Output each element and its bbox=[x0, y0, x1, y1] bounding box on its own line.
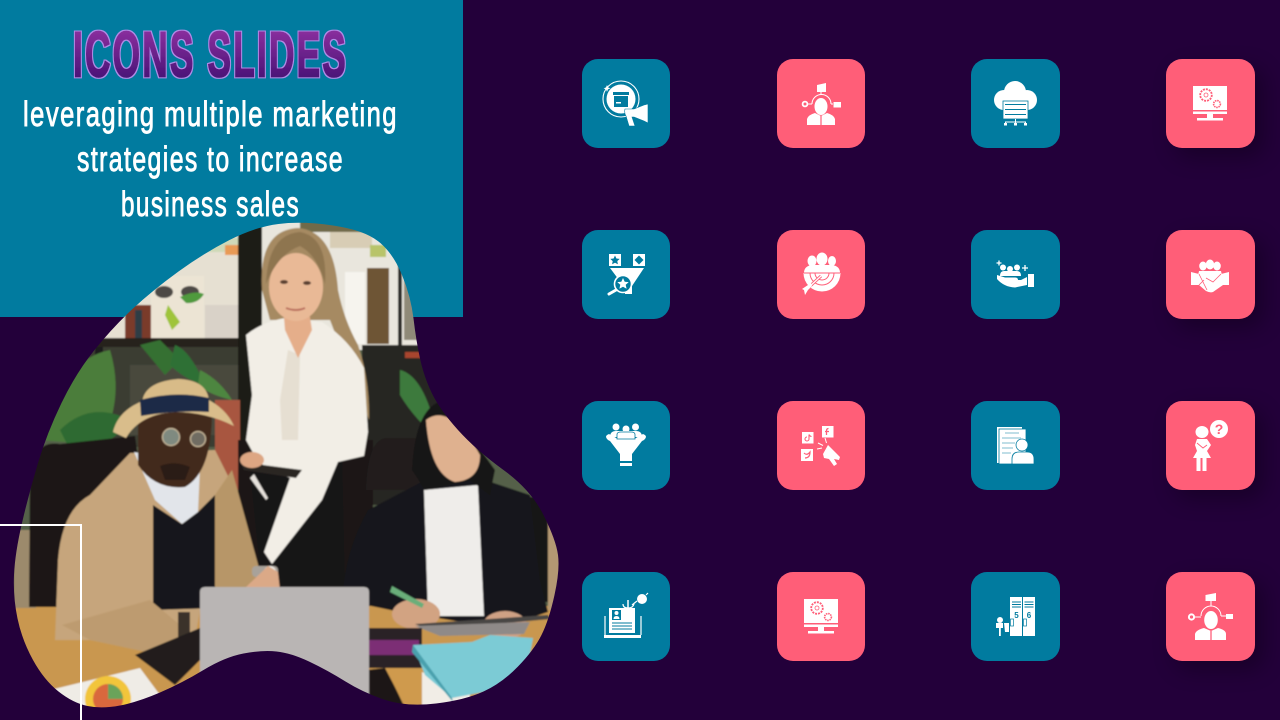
desk items left bbox=[135, 628, 200, 685]
subtitle: business sales bbox=[121, 185, 300, 224]
tile: confused customer bbox=[1166, 401, 1255, 490]
icon: computer settings bbox=[1193, 86, 1227, 120]
icon: numbered lockers and person bbox=[996, 597, 1035, 636]
right woman: t-shirt bbox=[424, 485, 484, 616]
tile: lockers bbox=[971, 572, 1060, 661]
icon: documents and person bbox=[997, 427, 1034, 464]
icon: group with target and arrow bbox=[802, 252, 840, 295]
tile: target audience bbox=[777, 230, 865, 319]
tile: business partnership bbox=[1166, 230, 1255, 319]
man: hat bbox=[113, 398, 234, 438]
woman standing: trousers bbox=[257, 462, 342, 532]
right chair bbox=[374, 438, 419, 490]
clipboard bbox=[415, 614, 549, 627]
tile: monitor with gears bbox=[1166, 59, 1255, 148]
right shelving bbox=[362, 345, 442, 505]
woman hand on laptop bbox=[245, 566, 280, 590]
icon: filter with stars bbox=[607, 254, 645, 296]
woman standing: hair bbox=[262, 228, 369, 420]
right woman: jacket bbox=[371, 479, 549, 622]
icon: woman with question bubble: ? bbox=[1215, 421, 1223, 437]
watch bbox=[252, 566, 278, 577]
tablet and hand bbox=[240, 462, 302, 478]
photo: three colleagues at a desk in blob mask bbox=[14, 222, 558, 708]
table bbox=[16, 604, 551, 697]
woman standing: blouse bbox=[246, 318, 368, 564]
dark shelving area bbox=[85, 338, 245, 347]
man: shirt bbox=[134, 452, 200, 524]
icon: hand holding people bbox=[996, 260, 1034, 288]
tile: product promotion megaphone bbox=[582, 59, 670, 148]
man: vest bbox=[153, 495, 215, 610]
icon: laptop with growing profile bbox=[604, 592, 648, 638]
icon: people in funnel bbox=[606, 424, 646, 466]
icon: megaphone with product bbox=[602, 80, 648, 126]
man: glasses bbox=[162, 428, 180, 446]
tile: manager with network bbox=[777, 59, 865, 148]
icon: woman with question bubble bbox=[1193, 420, 1228, 471]
dark gap behind the standing woman bbox=[237, 439, 374, 576]
plants bbox=[40, 350, 116, 445]
man: head bbox=[138, 412, 212, 487]
icon: megaphone and social boxes bbox=[801, 426, 840, 466]
tile: social media marketing bbox=[777, 401, 865, 490]
icon: numbered lockers and person: 6 bbox=[1027, 611, 1032, 620]
desk items right bbox=[367, 628, 422, 668]
back wall and shelves bbox=[104, 236, 240, 340]
tile: sales funnel bbox=[582, 401, 670, 490]
left chair bbox=[29, 436, 140, 607]
tile: customers in hand bbox=[971, 230, 1060, 319]
tile: manager with network, large bbox=[1166, 572, 1255, 661]
panel: teal header bbox=[0, 0, 463, 317]
subtitle: strategies to increase bbox=[77, 140, 344, 179]
teal books bbox=[413, 635, 533, 698]
icon: numbered lockers and person: 5 bbox=[1014, 611, 1019, 620]
tile: content growth on laptop bbox=[582, 572, 670, 661]
man: jacket bbox=[54, 449, 228, 641]
icon: computer settings bbox=[804, 599, 838, 634]
tile: product funnel with magnifier bbox=[582, 230, 670, 319]
icon: handshake with team bbox=[1191, 260, 1229, 292]
icon: businessman connected to tasks bbox=[1188, 593, 1233, 640]
icon: cloud with server rack bbox=[994, 81, 1037, 126]
right woman: hair and face bbox=[412, 400, 495, 495]
woman standing: face and neck bbox=[283, 316, 312, 358]
right woman: hands and pen bbox=[392, 599, 440, 629]
tile: monitor with gears, second bbox=[777, 572, 865, 661]
subtitle bbox=[23, 95, 398, 224]
man: arm and watch bbox=[178, 612, 190, 646]
laptop bbox=[200, 587, 369, 695]
decorative frame line bbox=[0, 524, 82, 720]
tile: customer documents bbox=[971, 401, 1060, 490]
box with eyes bbox=[151, 276, 204, 342]
tile: cloud server bbox=[971, 59, 1060, 148]
icon: businessman connected to tasks bbox=[802, 83, 841, 125]
